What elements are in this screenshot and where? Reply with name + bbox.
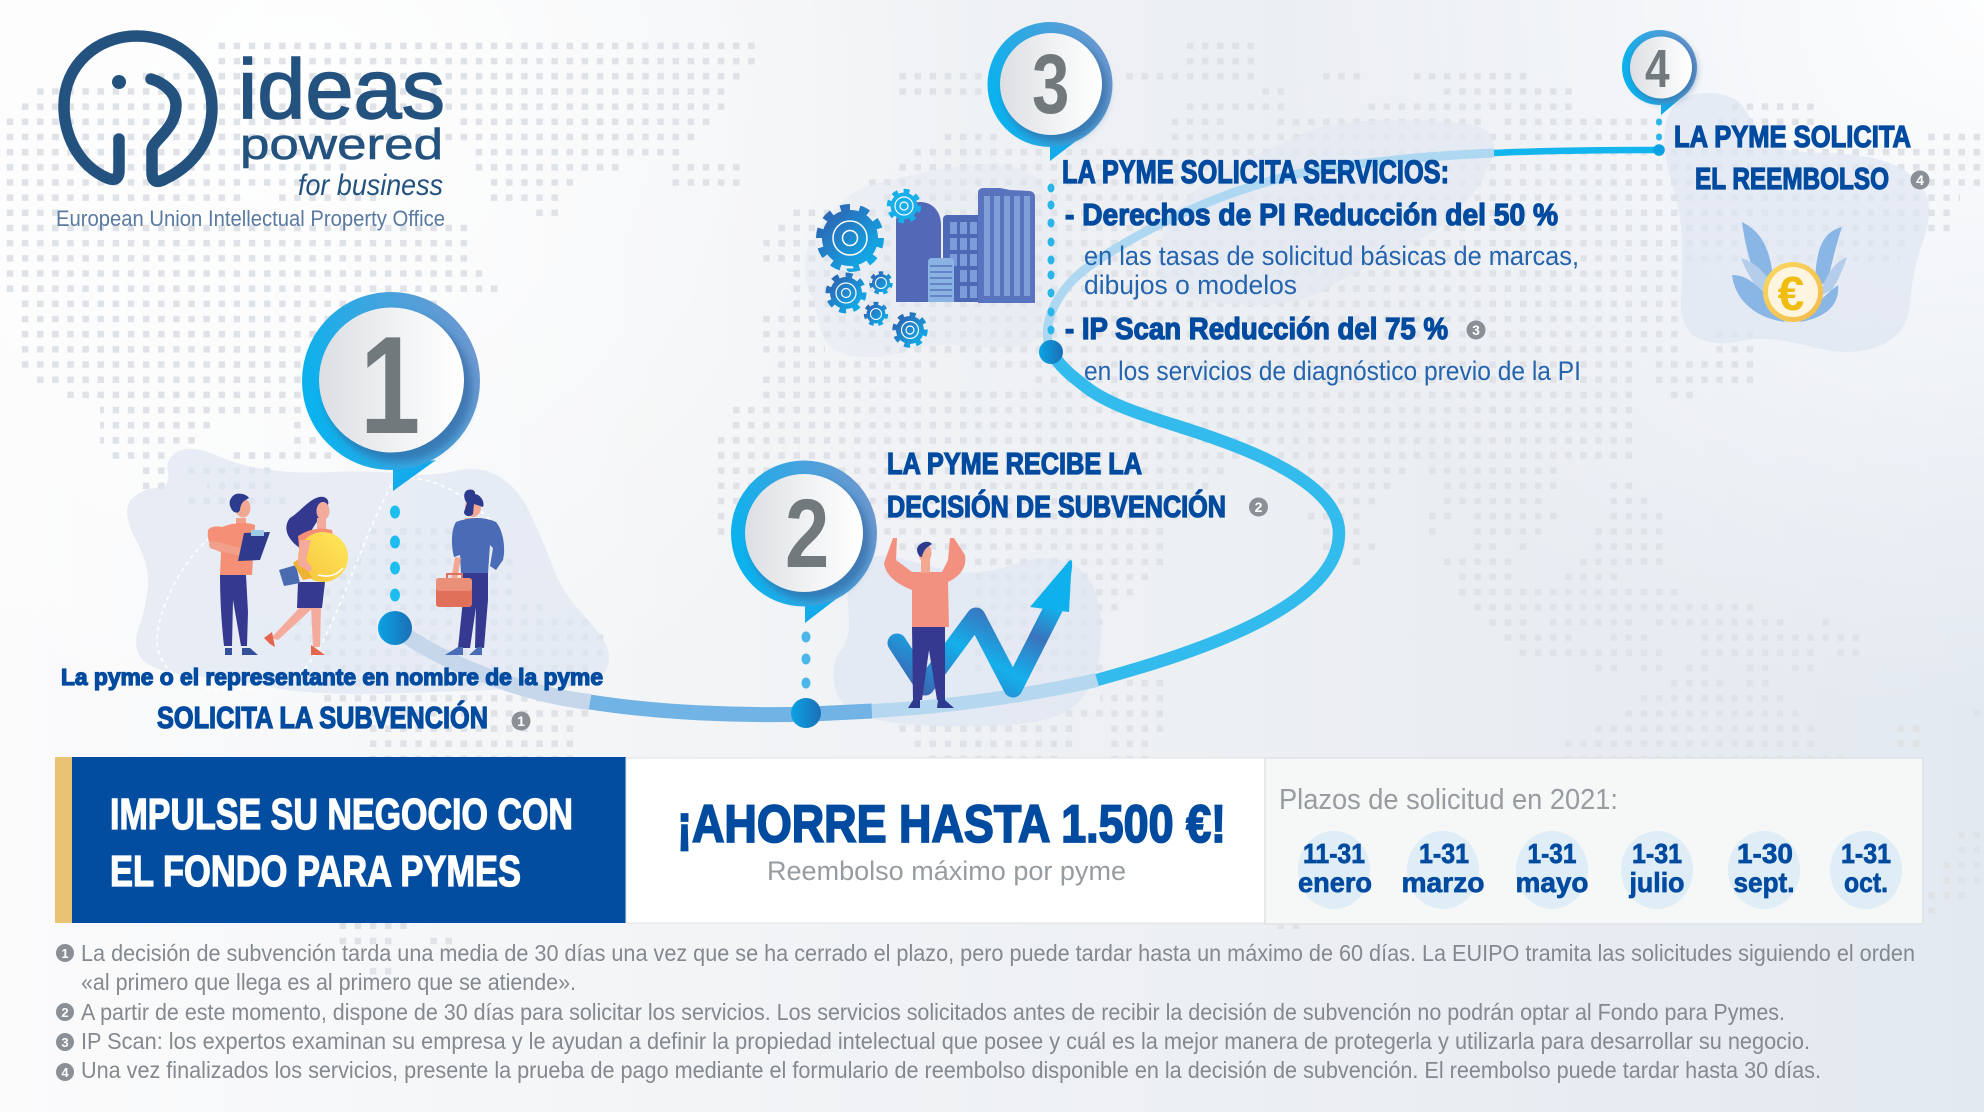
celebrating man bbox=[884, 538, 965, 708]
date: mayo bbox=[1516, 831, 1588, 909]
date: julio: 1-31 bbox=[1632, 838, 1682, 869]
gear left-lower bbox=[828, 275, 864, 311]
backdrop blob: step 4 bbox=[1664, 93, 1929, 352]
footnote badge 1 bbox=[512, 712, 530, 730]
step 1 caption bbox=[61, 664, 603, 735]
gear bottom bbox=[894, 314, 926, 346]
woman carrying light bulb bbox=[264, 497, 348, 655]
deadlines block bbox=[1265, 758, 1923, 924]
date: enero bbox=[1298, 831, 1372, 909]
blue title block: IMPULSE SU NEGOCIO CON bbox=[110, 790, 573, 839]
step 2 caption bbox=[887, 446, 1268, 524]
date: marzo bbox=[1402, 831, 1484, 909]
footnote badge 2: 2 bbox=[1255, 499, 1263, 515]
step 3 caption: - Derechos de PI Reducción del 50 % bbox=[1065, 197, 1558, 232]
footnote 2: 2 bbox=[61, 1005, 69, 1020]
date: sept bbox=[1728, 831, 1800, 909]
footnote 2: A partir de este momento, dispone de 30 días para solicitar los servicios. Los servicios solicitados antes de recibir la decisión de subvención no podrán optar al Fondo para Pymes. bbox=[81, 999, 1785, 1025]
date: mayo: mayo bbox=[1516, 867, 1588, 898]
step 3 caption bbox=[1062, 154, 1581, 386]
step 4 caption bbox=[1674, 119, 1930, 196]
date: sept: 1-30 bbox=[1737, 838, 1793, 869]
gear top bbox=[889, 191, 919, 221]
pin 2 bbox=[731, 460, 877, 623]
icon: euro coin with leaves: € bbox=[1778, 268, 1804, 321]
step 3 caption: LA PYME SOLICITA SERVICIOS: bbox=[1062, 154, 1449, 190]
date: oct bbox=[1830, 831, 1902, 909]
footnote 4: Una vez finalizados los servicios, presente la prueba de pago mediante el formulario de reembolso disponible en la decisión de subvención. El reembolso puede tardar hasta 30 días. bbox=[81, 1057, 1821, 1083]
number 4: 4 bbox=[1645, 39, 1670, 99]
large gear bbox=[820, 208, 880, 268]
rising arrow chart bbox=[897, 560, 1072, 688]
step 4 caption: EL REEMBOLSO bbox=[1695, 161, 1889, 196]
footnote badge 4 bbox=[1910, 170, 1930, 190]
step 1 caption: SOLICITA LA SUBVENCIÓN bbox=[157, 699, 488, 735]
logo: ideas powered for business: European Union Intellectual Property Office bbox=[56, 206, 445, 231]
logo wordmark: ideas bbox=[238, 42, 445, 136]
savings block bbox=[626, 758, 1265, 923]
connector dots: pin 1 bbox=[378, 506, 412, 645]
footnote 4: 4 bbox=[61, 1065, 69, 1080]
step 3 caption: en los servicios de diagnóstico previo de la PI bbox=[1084, 356, 1581, 386]
logo: ideas powered for business: for business bbox=[298, 169, 443, 202]
date: julio: julio bbox=[1629, 867, 1684, 898]
number 1: 1 bbox=[360, 308, 420, 463]
footnote 3: 3 bbox=[61, 1035, 69, 1050]
pin 1 bbox=[302, 292, 480, 491]
savings block: ¡AHORRE HASTA 1.500 €! bbox=[677, 795, 1226, 854]
backdrop blob: step 3 text bbox=[1157, 120, 1494, 305]
date: sept: sept. bbox=[1734, 867, 1794, 898]
gear small 1 bbox=[871, 273, 891, 293]
number 3: 3 bbox=[1032, 38, 1069, 132]
logo mark bbox=[64, 36, 212, 181]
pin 3 bbox=[988, 22, 1112, 161]
step 2 caption: LA PYME RECIBE LA bbox=[887, 446, 1142, 481]
pin 4 bbox=[1622, 30, 1697, 115]
footnote 1: «al primero que llega es al primero que se atiende». bbox=[81, 969, 576, 995]
date: oct: oct. bbox=[1844, 867, 1888, 898]
date: oct: 1-31 bbox=[1841, 838, 1891, 869]
illustration: three people with clipboard, bulb and briefcase bbox=[157, 478, 504, 690]
step 3 caption: en las tasas de solicitud básicas de marcas, bbox=[1084, 241, 1579, 271]
date: enero: 11-31 bbox=[1303, 838, 1365, 869]
gear small 2 bbox=[866, 304, 886, 324]
icon: euro coin with leaves bbox=[1732, 222, 1847, 322]
footnote badge 4: 4 bbox=[1916, 172, 1924, 188]
date: enero: enero bbox=[1298, 867, 1372, 898]
backdrop blob: step 2 bbox=[833, 556, 1102, 726]
gold accent strip bbox=[55, 757, 72, 923]
step 4 caption: LA PYME SOLICITA bbox=[1674, 119, 1911, 154]
blue title block: EL FONDO PARA PYMES bbox=[110, 847, 521, 896]
logo: ideas powered for business bbox=[56, 36, 445, 231]
footnote 1 bbox=[56, 940, 1915, 995]
backdrop blob: step 1 bbox=[127, 449, 609, 694]
blue title block bbox=[72, 757, 626, 923]
man with briefcase bbox=[436, 490, 504, 655]
step 1 caption: La pyme o el representante en nombre de la pyme bbox=[61, 664, 603, 690]
footnote badge 3: 3 bbox=[1472, 322, 1480, 338]
footnote 1: 1 bbox=[61, 946, 69, 961]
footnote badge 1: 1 bbox=[517, 713, 525, 729]
step 2 caption: DECISIÓN DE SUBVENCIÓN bbox=[887, 488, 1226, 524]
illustration: buildings and gears bbox=[820, 188, 1035, 346]
dashed decorative orbit bbox=[157, 478, 490, 690]
step 3 caption: dibujos o modelos bbox=[1084, 270, 1297, 300]
connector dots: pin 3 bbox=[1039, 184, 1063, 364]
date: marzo: 1-31 bbox=[1419, 838, 1469, 869]
deadlines block: Plazos de solicitud en 2021: bbox=[1279, 784, 1618, 816]
footnotes bbox=[56, 940, 1915, 1083]
backdrop blob: step 3 gears bbox=[805, 164, 1058, 357]
date: mayo: 1-31 bbox=[1528, 838, 1576, 869]
step 3 caption: - IP Scan Reducción del 75 % bbox=[1065, 311, 1448, 346]
footnote 1: La decisión de subvención tarda una media de 30 días una vez que se ha cerrado el plazo, pero puede tardar hasta un máximo de 60 días. La EUIPO tramita las solicitudes siguiendo el orden bbox=[81, 940, 1915, 966]
date: julio bbox=[1621, 831, 1693, 909]
footnote 3: IP Scan: los expertos examinan su empresa y le ayudan a definir la propiedad intelectual que posee y cuál es la mejor manera de protegerla y utilizarla para desarrollar su negocio. bbox=[81, 1028, 1810, 1054]
connector dots: pin 4 bbox=[1653, 118, 1665, 156]
man with clipboard bbox=[208, 494, 270, 655]
footnote badge 2 bbox=[1249, 498, 1268, 516]
footnote badge 3 bbox=[1466, 320, 1486, 340]
number 2: 2 bbox=[785, 480, 829, 588]
route ribbon connecting the steps bbox=[395, 150, 1656, 715]
connector dots: pin 2 bbox=[791, 632, 821, 728]
logo: ideas powered for business: powered bbox=[240, 120, 443, 169]
date: marzo: marzo bbox=[1402, 867, 1484, 898]
savings block: Reembolso máximo por pyme bbox=[767, 856, 1126, 886]
buildings bbox=[896, 188, 1035, 303]
illustration: man celebrating with rising arrow bbox=[884, 538, 1072, 708]
bottom panel bbox=[55, 757, 1923, 924]
